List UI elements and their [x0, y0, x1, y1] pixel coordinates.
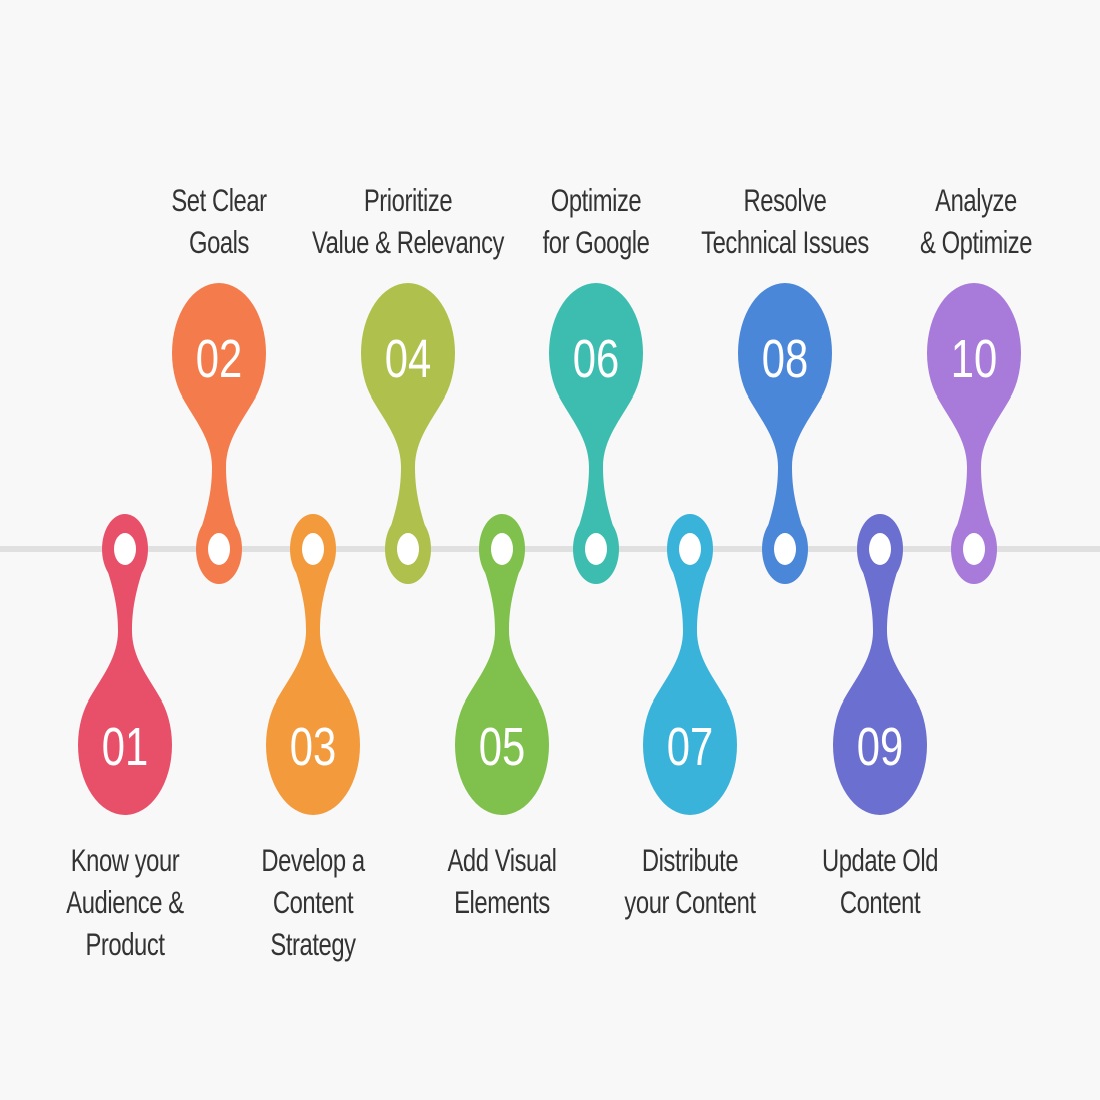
pin 03: 03 — [290, 717, 336, 777]
pin 09: 09 — [857, 717, 903, 777]
bottom labels: Elements — [454, 885, 550, 920]
top labels: Resolve — [744, 183, 827, 218]
top labels — [171, 183, 1032, 260]
top labels: Analyze — [935, 183, 1017, 218]
pin 07 — [643, 514, 737, 815]
bottom labels: Audience & — [66, 885, 185, 920]
pin 10 — [927, 283, 1021, 584]
pin 10: 10 — [951, 329, 997, 389]
bottom labels: Content — [840, 885, 921, 920]
pin 06: 06 — [573, 329, 619, 389]
top labels: Value & Relevancy — [312, 225, 505, 260]
top labels: Goals — [189, 225, 249, 260]
bottom labels: Develop a — [261, 843, 366, 878]
pin 04 — [361, 283, 455, 584]
pin 01: 01 — [102, 717, 148, 777]
bottom labels: Update Old — [822, 843, 938, 878]
pin 08 — [738, 283, 832, 584]
bottom labels: Add Visual — [447, 843, 557, 878]
top labels: for Google — [543, 225, 649, 260]
top labels: Technical Issues — [701, 225, 869, 260]
top labels: & Optimize — [920, 225, 1032, 260]
top labels: Optimize — [551, 183, 641, 218]
pin 02 — [172, 283, 266, 584]
bottom labels — [66, 843, 938, 962]
bottom labels: Strategy — [270, 927, 356, 962]
pin 03 — [266, 514, 360, 815]
bottom labels: Content — [273, 885, 354, 920]
top labels: Prioritize — [364, 183, 452, 218]
pin 07: 07 — [667, 717, 713, 777]
pin 06 — [549, 283, 643, 584]
bottom labels: Distribute — [642, 843, 738, 878]
bottom labels: your Content — [624, 885, 756, 920]
bottom labels: Product — [85, 927, 165, 962]
top labels: Set Clear — [171, 183, 267, 218]
pin 05: 05 — [479, 717, 525, 777]
pin 02: 02 — [196, 329, 242, 389]
pin 04: 04 — [385, 329, 431, 389]
pin 01 — [78, 514, 172, 815]
pin 09 — [833, 514, 927, 815]
bottom labels: Know your — [71, 843, 179, 878]
pin 05 — [455, 514, 549, 815]
pin 08: 08 — [762, 329, 808, 389]
